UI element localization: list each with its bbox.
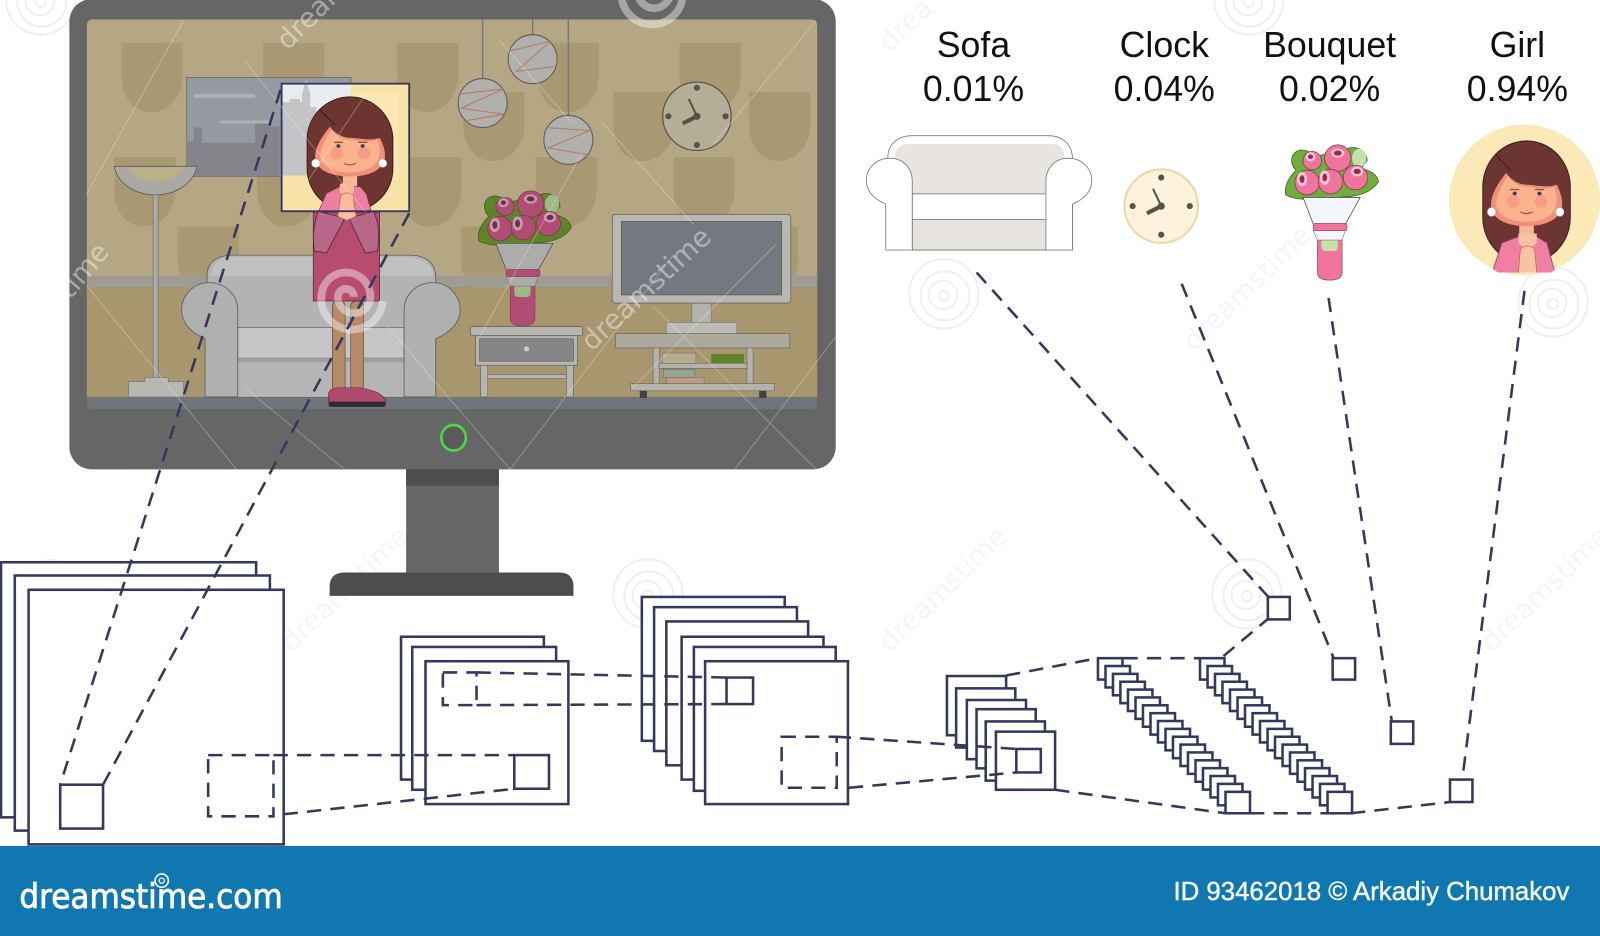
watermark text on monitor: dreamstime: [575, 221, 718, 357]
label: clock: Clock: [1120, 25, 1209, 65]
sleeves: [313, 211, 379, 253]
output neurons: [1268, 597, 1472, 802]
CNN layer 4 feature maps: [947, 676, 1055, 790]
footer logo: dreamstime.com: [19, 877, 283, 916]
label: sofa: 0.01%: [923, 69, 1024, 109]
wall picture: [187, 78, 351, 177]
girl head: [307, 97, 393, 211]
faint watermark text on white: [274, 0, 1600, 658]
label: clock: 0.04%: [1114, 69, 1215, 109]
watermark lines on monitor: [87, 20, 836, 480]
faint watermark spirals on white: [6, 0, 1588, 630]
watermark text on monitor: stime: [42, 236, 116, 316]
faint watermark text on white: dreamstime: [274, 520, 416, 658]
floor lamp: [114, 166, 197, 397]
layer 3 dashed window: [782, 737, 837, 788]
wall band and lower wall: [87, 276, 817, 398]
power indicator: [441, 425, 466, 451]
icon: bouquet: [1285, 145, 1379, 280]
layer 2 square: [514, 755, 549, 789]
detection box background: [282, 80, 409, 211]
CNN layer 2 feature maps: [401, 637, 568, 804]
monitor: [42, 0, 836, 480]
label: girl: [1467, 25, 1568, 109]
neck and hands: [318, 184, 371, 220]
layer 2 dashed window: [443, 672, 477, 705]
watermark text on monitor: [42, 0, 718, 357]
girl figure: [307, 97, 393, 407]
watermark spirals on monitor: [321, 0, 683, 330]
label: bouquet: [1263, 25, 1396, 109]
icon: sofa: [866, 136, 1092, 250]
sofa: [182, 255, 460, 397]
icon: girl portrait: [1449, 124, 1600, 276]
wall clock: [663, 82, 731, 151]
icon: clock: [1124, 169, 1198, 243]
side table: [470, 327, 583, 397]
label: sofa: Sofa: [937, 25, 1010, 65]
label: bouquet: Bouquet: [1263, 25, 1396, 65]
dashed window: [208, 755, 273, 816]
receptive field square: [60, 785, 103, 829]
label: bouquet: 0.02%: [1279, 69, 1380, 109]
footer bar: [0, 846, 1600, 936]
legs: [332, 301, 363, 391]
hanging lamps: [458, 19, 593, 164]
footer credit: ID 93462018 © Arkadiy Chumakov: [1173, 878, 1570, 906]
room wall: [87, 19, 817, 277]
wallpaper pattern: [114, 43, 810, 296]
screen room scene: [87, 19, 817, 409]
label: sofa: [923, 25, 1024, 109]
detection box outline: [282, 84, 409, 211]
fully connected stack 2: [1200, 658, 1352, 813]
dress: [313, 212, 380, 301]
label: girl: Girl: [1490, 25, 1545, 65]
monitor stand: [330, 467, 573, 596]
fully connected stack 1: [1098, 658, 1250, 813]
layer 4 square: [1016, 749, 1041, 772]
monitor bezel: [69, 0, 836, 469]
shoes: [329, 388, 386, 407]
faint watermark text on white: dreamstime: [872, 520, 1014, 658]
label: girl: 0.94%: [1467, 69, 1568, 109]
object classes: [866, 25, 1600, 280]
bouquet in room: [478, 191, 571, 326]
layer 3 square: [727, 678, 753, 704]
CNN layer 3 feature maps: [642, 597, 848, 804]
label: clock: [1114, 25, 1215, 109]
CNN layer 1 feature maps: [1, 562, 284, 844]
dashed connection lines: [60, 90, 1524, 814]
TV and stand: [612, 214, 791, 398]
floor: [87, 397, 817, 409]
faint watermark text on white: dreamstime: [1177, 219, 1318, 357]
